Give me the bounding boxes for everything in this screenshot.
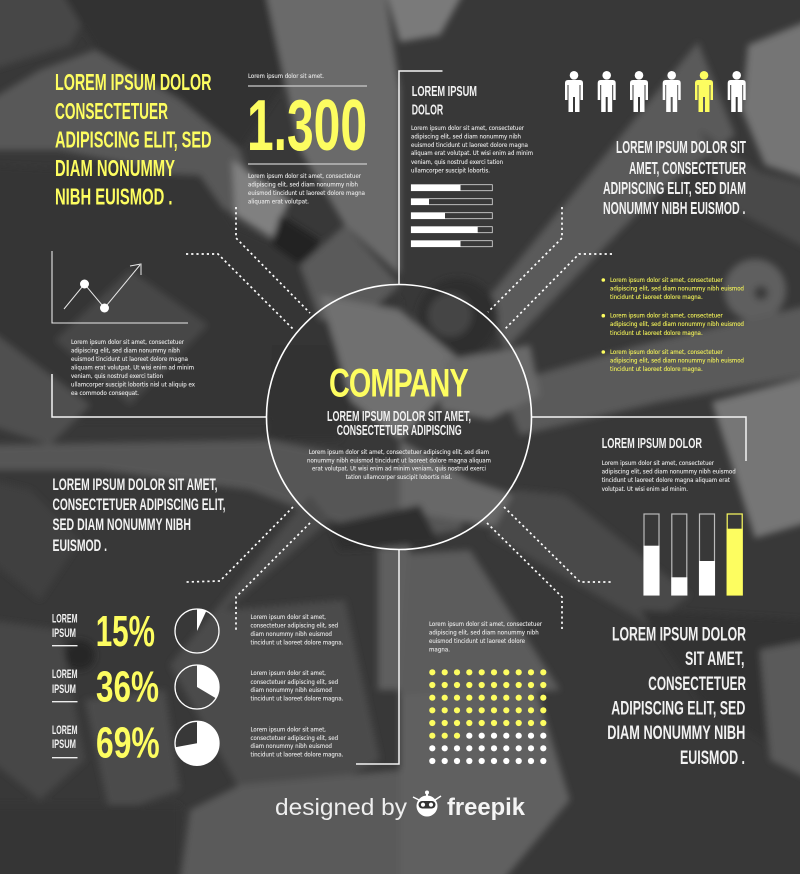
heading: lower left white text: CONSECTETUER ADIPISCING ELIT,: [52, 495, 226, 514]
dot matrix panel text: adipiscing elit, sed diam nonummy nibh: [429, 631, 539, 637]
description 15%: tincidunt ut laoreet dolore magna.: [250, 641, 343, 647]
description 36%: tincidunt ut laoreet dolore magna.: [250, 697, 343, 703]
stat row: 15%: LOREM: [52, 612, 78, 626]
stat row: 69%: 69%: [96, 719, 160, 768]
panel body text: ullamcorper suscipit lobortis.: [411, 168, 490, 174]
right panel body text: tincidunt ut laoreet dolore magna aliquam erat: [602, 478, 731, 484]
panel body text: adipiscing elit, sed diam nonummy nibh: [411, 134, 521, 140]
stat description: adipiscing elit, sed diam nonummy nibh: [248, 182, 358, 188]
description 69%: [250, 727, 343, 759]
dot matrix panel text: [429, 622, 543, 654]
stat row: 36%: 36%: [96, 663, 159, 712]
vertical bar chart: [644, 514, 743, 596]
circle body text: nonummy nibh euismod tincidunt ut laoreet dolore magna aliquam: [307, 458, 491, 464]
circle body text: erat volutpat. Ut wisi enim ad minim veniam, quis nostrud exerci: [312, 466, 486, 472]
subtitle: CONSECTETUER ADIPISCING: [337, 423, 462, 439]
heading: lower left white text: [52, 475, 226, 555]
stat row: 15%: IPSUM: [52, 626, 76, 640]
circle body text: [307, 450, 491, 481]
right panel body text: Lorem ipsum dolor sit amet, consectetuer: [602, 461, 715, 467]
stat row: 69%: LOREM: [52, 723, 78, 737]
description 15%: consectetuer adipiscing elit, sed: [250, 624, 338, 630]
stat row: 69%: [52, 719, 343, 768]
footer: designed by freepik: designed by: [275, 794, 408, 820]
right panel body text: adipiscing elit, sed diam nonummy nibh euismod: [602, 470, 736, 476]
right panel heading: LOREM IPSUM DOLOR: [602, 435, 702, 452]
heading: bottom right white text: [607, 624, 746, 769]
circle body text: tation ullamcorper suscipit lobortis nisl.: [346, 475, 452, 481]
description 69%: consectetuer adipiscing elit, sed: [250, 736, 338, 742]
description 69%: tincidunt ut laoreet dolore magna.: [250, 753, 343, 759]
subtitle: [327, 409, 471, 439]
chart description: euismod tincidunt ut laoreet dolore magna: [71, 357, 188, 363]
heading: lower left white text: SED DIAM NONUMMY NIBH: [52, 515, 191, 534]
line chart icon: [52, 251, 188, 323]
panel heading: DOLOR: [412, 102, 443, 118]
right panel body text: [602, 461, 736, 493]
right panel body text: volutpat. Ut wisi enim ad minim.: [602, 487, 688, 493]
dot matrix panel text: euismod tincidunt ut laoreet dolore: [429, 639, 525, 645]
stat description: [248, 174, 365, 206]
heading: lower left white text: EUISMOD .: [52, 536, 107, 555]
description 69%: diam nonummy nibh euismod: [250, 744, 332, 750]
stat: 1.300 block: [247, 74, 367, 206]
chart description: ea commodo consequat.: [71, 391, 139, 397]
stat row: 36%: [52, 663, 343, 712]
description 15%: diam nonummy nibh euismod: [250, 632, 332, 638]
stat row: 15%: 15%: [96, 607, 155, 656]
yellow bullet list: Lorem ipsum dolor sit amet, consectetuer: [610, 314, 723, 320]
description 15%: [250, 615, 343, 647]
heading: bottom right white text: SIT AMET,: [685, 648, 744, 670]
icons: six people, one highlighted: [565, 71, 746, 112]
heading: bottom right white text: EUISMOD .: [680, 747, 745, 769]
dotted connectors: [186, 207, 612, 630]
chart description: veniam, quis nostrud exerci tation: [71, 374, 163, 380]
big number: 1.300: [247, 86, 367, 166]
yellow bullet list: adipiscing elit, sed diam nonummy nibh euismod: [610, 286, 744, 292]
heading: top left yellow text: NIBH EUISMOD .: [55, 184, 172, 210]
progress bars: [411, 184, 492, 247]
chart description: adipiscing elit, sed diam nonummy nibh: [71, 348, 180, 354]
subtitle: LOREM IPSUM DOLOR SIT AMET,: [327, 409, 471, 425]
pie chart 69%: [175, 721, 219, 765]
heading: top left yellow text: DIAM NONUMMY: [55, 155, 175, 181]
heading: top left yellow text: LOREM IPSUM DOLOR: [55, 69, 212, 95]
stat description: euismod tincidunt ut laoreet dolore magna: [248, 191, 365, 197]
description 36%: diam nonummy nibh euismod: [250, 688, 332, 694]
panel body text: aliquam erat volutpat. Ut wisi enim ad minim: [411, 151, 533, 157]
connector lines around the circle: [52, 71, 746, 764]
stat: 1.300 block: Lorem ipsum dolor sit amet.: [248, 74, 324, 80]
stat row: 36%: LOREM: [52, 667, 78, 681]
heading: top left yellow text: ADIPISCING ELIT, SED: [55, 126, 212, 152]
chart description: Lorem ipsum dolor sit amet, consectetuer: [71, 340, 185, 346]
chart description: ullamcorper suscipit lobortis nisl ut aliquip ex: [71, 382, 196, 388]
heading: top right white text: [603, 137, 746, 218]
panel body text: veniam, quis nostrud exerci tation: [411, 160, 503, 166]
pie chart 15%: [175, 609, 219, 653]
stat row: 69%: IPSUM: [52, 737, 76, 751]
dot matrix panel text: Lorem ipsum dolor sit amet, consectetuer: [429, 622, 543, 628]
panel: right text with vertical bars: [602, 435, 743, 596]
yellow bullet list: tincidunt ut laoreet dolore magna.: [610, 295, 703, 301]
yellow bullet list: Lorem ipsum dolor sit amet, consectetuer: [610, 278, 723, 284]
chart description: aliquam erat volutpat. Ut wisi enim ad minim: [71, 366, 194, 372]
circle body text: Lorem ipsum dolor sit amet, consectetuer adipiscing elit, sed diam: [309, 450, 489, 456]
panel body text: [411, 126, 533, 174]
description 36%: [250, 671, 343, 703]
panel body text: euismod tincidunt ut laoreet dolore magna: [411, 143, 528, 149]
yellow bullet list: adipiscing elit, sed diam nonummy nibh euismod: [610, 358, 744, 364]
stat description: Lorem ipsum dolor sit amet, consectetuer: [248, 174, 362, 180]
panel heading: LOREM IPSUM: [412, 83, 477, 100]
description 15%: Lorem ipsum dolor sit amet,: [250, 615, 326, 621]
stat row: 15%: [52, 607, 343, 656]
stat row: 36%: IPSUM: [52, 682, 76, 696]
footer: designed by freepik: freepik: [447, 794, 526, 821]
icon: freepik mascot: [413, 790, 441, 816]
panel body text: Lorem ipsum dolor sit amet, consectetuer: [411, 126, 525, 132]
stat description: aliquam erat volutpat.: [248, 200, 309, 206]
heading: top left yellow text: [55, 69, 212, 210]
yellow bullet list: tincidunt ut laoreet dolore magna.: [610, 331, 703, 337]
title: company: COMPANY: [329, 361, 469, 406]
chart description: [71, 340, 196, 397]
description 69%: Lorem ipsum dolor sit amet,: [250, 727, 326, 733]
central circle with company title: [266, 284, 532, 550]
description 36%: Lorem ipsum dolor sit amet,: [250, 671, 326, 677]
yellow bullet list: tincidunt ut laoreet dolore magna.: [610, 367, 703, 373]
panel heading: [412, 83, 477, 118]
panel: top centre text and progress bars: [411, 83, 533, 247]
description 36%: consectetuer adipiscing elit, sed: [250, 680, 338, 686]
heading: lower left white text: LOREM IPSUM DOLOR SIT AMET,: [52, 475, 218, 494]
yellow bullet list: Lorem ipsum dolor sit amet, consectetuer: [610, 350, 723, 356]
dot matrix panel text: magna.: [429, 648, 450, 654]
heading: top left yellow text: CONSECTETUER: [55, 98, 168, 124]
yellow bullet list: [602, 278, 744, 373]
dot matrix chart: [429, 669, 546, 764]
footer: designed by freepik: [275, 790, 526, 821]
yellow bullet list: adipiscing elit, sed diam nonummy nibh euismod: [610, 322, 744, 328]
pie chart 36%: [175, 665, 219, 709]
